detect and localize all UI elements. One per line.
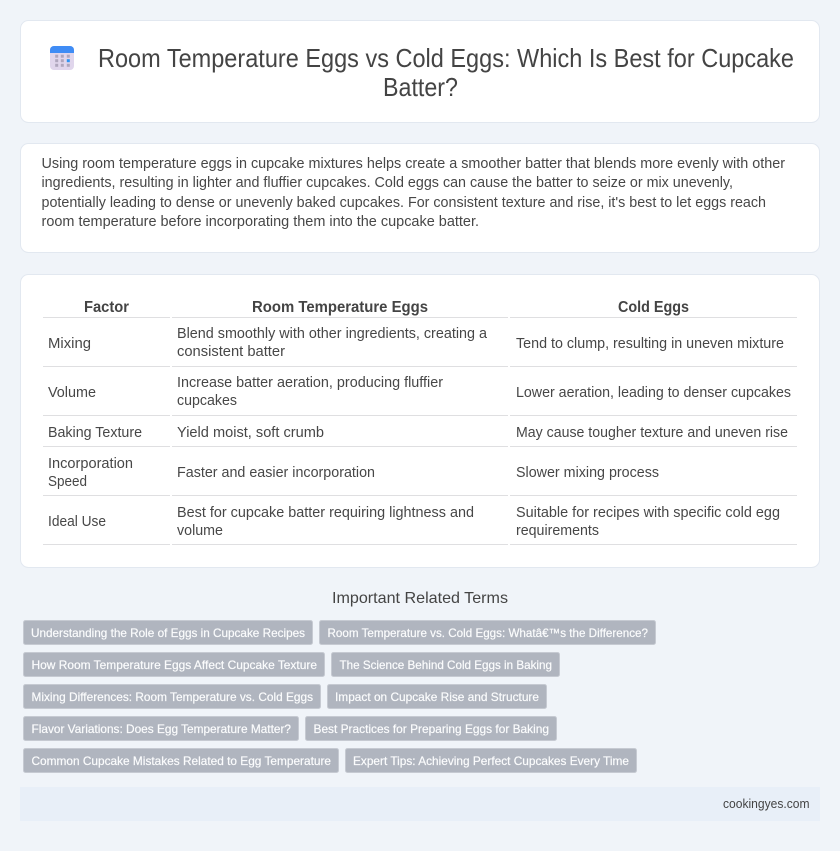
panel: comparison table card: [20, 274, 820, 568]
table row: incorporation speed: [48, 456, 659, 490]
table row: volume: Lower aeration, leading to denser cupcakes: [516, 385, 791, 401]
table row: ideal use: [48, 505, 780, 539]
chip: best practices: Best Practices for Preparing Eggs for Baking: [314, 722, 549, 736]
table row: baking texture: May cause tougher texture and uneven rise: [516, 425, 788, 441]
footer bar: cookingyes.com: [723, 797, 810, 811]
footer bar: [20, 787, 820, 821]
table row: volume: cupcakes: [177, 393, 237, 409]
chip: role of eggs: [24, 620, 312, 644]
table row: baking texture: Yield moist, soft crumb: [177, 425, 324, 441]
table row: ideal use: Suitable for recipes with specific cold egg: [516, 505, 780, 521]
title: Room Temperature Eggs vs Cold Eggs: Which Is Best for Cupcake: [98, 45, 794, 73]
table header row: Factor: [84, 299, 129, 316]
title: [98, 45, 794, 102]
table row: mixing: [48, 326, 784, 360]
table header row: [84, 299, 689, 316]
chip: science: The Science Behind Cold Eggs in Baking: [340, 658, 552, 672]
chip: rise and structure: Impact on Cupcake Rise and Structure: [335, 690, 539, 704]
table row: incorporation speed: Faster and easier incorporation: [177, 465, 375, 481]
icon: calendar: [50, 46, 74, 70]
panel: intro paragraph card: [20, 144, 820, 252]
chip: texture: [24, 652, 324, 676]
table row: volume: Increase batter aeration, producing fluffier: [177, 375, 443, 391]
table header row: Room Temperature Eggs: [252, 299, 428, 316]
table row: mixing: Tend to clump, resulting in uneven mixture: [516, 336, 784, 352]
chip: role of eggs: Understanding the Role of Eggs in Cupcake Recipes: [31, 626, 305, 640]
chip: texture: How Room Temperature Eggs Affect Cupcake Texture: [32, 658, 317, 672]
intro paragraph text: potentially leading to dense or unevenly baked cupcakes. For consistent texture and rise, it's best to let eggs reach: [42, 195, 766, 211]
chip: mixing differences: Mixing Differences: Room Temperature vs. Cold Eggs: [32, 690, 313, 704]
chip: common mistakes: Common Cupcake Mistakes Related to Egg Temperature: [32, 754, 331, 768]
table row: ideal use: volume: [177, 523, 223, 539]
panel: title card: [20, 20, 820, 122]
chip: what's the difference: [320, 620, 656, 644]
table row: mixing: Mixing: [48, 336, 91, 352]
chip: common mistakes: [24, 748, 338, 772]
table row: volume: [48, 375, 791, 409]
chip: science: [332, 652, 560, 676]
title: Batter?: [383, 74, 458, 102]
table row: ideal use: Best for cupcake batter requiring lightness and: [177, 505, 474, 521]
chip: expert tips: [346, 748, 636, 772]
table row: mixing: Blend smoothly with other ingredients, creating a: [177, 326, 488, 342]
table row: incorporation speed: Slower mixing process: [516, 465, 659, 481]
chip: flavor variations: [24, 716, 298, 740]
chip: rise and structure: [328, 684, 546, 708]
table header row: Cold Eggs: [618, 299, 689, 316]
intro paragraph text: [42, 156, 785, 230]
table row: ideal use: requirements: [516, 523, 599, 539]
table row: baking texture: Baking Texture: [48, 425, 142, 441]
intro paragraph text: ingredients, resulting in lighter and fluffier cupcakes. Cold eggs can cause the batter to seize or mix unevenly,: [42, 175, 733, 191]
heading: important related terms: Important Related Terms: [332, 590, 508, 607]
chip: flavor variations: Flavor Variations: Does Egg Temperature Matter?: [32, 722, 291, 736]
table row: incorporation speed: Incorporation: [48, 456, 133, 472]
chip: what's the difference: Room Temperature vs. Cold Eggs: Whatâ€™s the Difference?: [328, 626, 648, 640]
intro paragraph text: Using room temperature eggs in cupcake mixtures helps create a smoother batter that blends more evenly with other: [42, 156, 785, 172]
intro paragraph text: room temperature before incorporating them into the cupcake batter.: [42, 214, 479, 230]
table row: incorporation speed: Speed: [48, 474, 87, 490]
chip: best practices: [306, 716, 556, 740]
table row: volume: Volume: [48, 385, 96, 401]
table row: baking texture: [48, 425, 788, 441]
table row: mixing: consistent batter: [177, 344, 285, 360]
related terms chips: [24, 620, 656, 772]
chip: expert tips: Expert Tips: Achieving Perfect Cupcakes Every Time: [353, 754, 629, 768]
table row: ideal use: Ideal Use: [48, 514, 106, 530]
chip: mixing differences: [24, 684, 320, 708]
